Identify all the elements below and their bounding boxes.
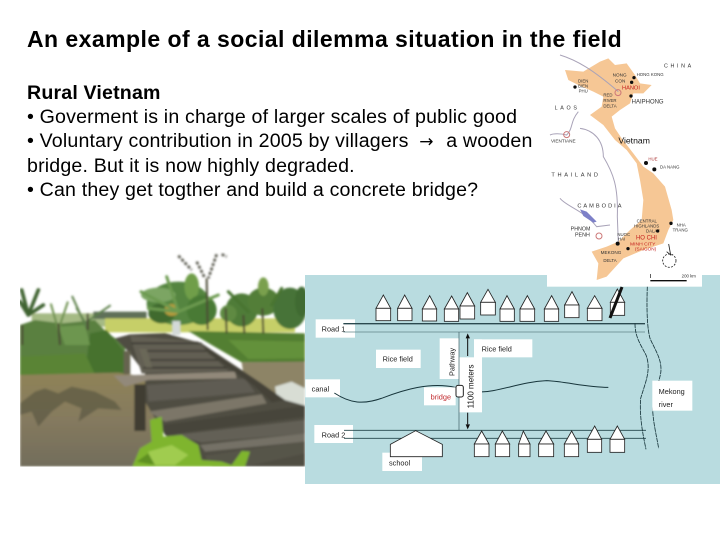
map: place labels: PENH	[575, 233, 590, 239]
map: place labels: CON	[615, 78, 625, 83]
photo: muddy water	[20, 362, 305, 467]
canal line	[334, 381, 608, 402]
arrow: map to village	[610, 287, 622, 318]
map: place labels: CHINA	[664, 64, 694, 70]
label: bridge: bridge	[431, 393, 451, 402]
text block: description: • Voluntary contribution in 2005 by villagers → a wooden	[27, 130, 533, 152]
label: 1100 meters: 1100 meters	[467, 365, 476, 408]
label: Mekong river: river	[659, 400, 673, 409]
map: place labels: HAI	[618, 237, 625, 242]
photo: vegetation background	[20, 254, 308, 376]
title: An example of a social dilemma situation in the field	[27, 26, 622, 52]
map: place labels: CAMBODIA	[577, 203, 624, 209]
map: place labels: HIGHLANDS	[634, 224, 659, 229]
label: Pathway	[440, 338, 459, 379]
map: place labels: HUE	[648, 157, 658, 162]
photo: foreground green bush	[132, 417, 250, 467]
map: place labels: DALAT	[646, 229, 660, 234]
label: Road 1	[316, 319, 355, 338]
map: scale bar: 200 km	[682, 273, 696, 278]
map: city markers	[573, 76, 673, 250]
map panel: Vietnam	[547, 55, 702, 287]
label: Rice field left: Rice field	[383, 355, 413, 364]
map: place labels: NHA	[677, 223, 686, 228]
photo: banana tree clumps	[141, 273, 308, 329]
map: place labels: PHNOM	[571, 226, 591, 232]
map: Vietnam territory	[565, 58, 673, 280]
photo: tree trunks	[22, 278, 263, 345]
map: place labels: Vietnam	[618, 136, 650, 146]
map: Con Dao inset	[663, 244, 676, 267]
map: place labels: TRANG	[673, 227, 688, 232]
label: Mekong river	[652, 381, 692, 411]
houses row 1	[376, 289, 625, 321]
label: Road 1: Road 1	[322, 324, 345, 333]
map: place labels: MINH CITY	[630, 242, 656, 248]
panel: village schematic background	[305, 275, 720, 484]
map: scale bar	[650, 273, 696, 281]
map: place labels: LAOS	[555, 105, 580, 111]
map: place labels: DELTA	[603, 258, 617, 263]
label: Rice field right	[474, 339, 532, 369]
text block: description: • Can they get togther and build a concrete bridge?	[27, 179, 478, 201]
map: place labels: NONG	[613, 73, 627, 78]
map: border rivers	[550, 55, 618, 243]
label: canal	[305, 379, 340, 397]
label: Road 2: Road 2	[322, 431, 345, 440]
map: Tonle Sap lake	[580, 209, 597, 223]
map: place labels: THAILAND	[551, 173, 601, 179]
map: capital markers	[564, 90, 621, 239]
map: place labels: MEKONG	[601, 250, 622, 255]
schematic: village diagram	[305, 287, 692, 471]
map: place labels: RED	[603, 93, 612, 98]
label: canal: canal	[312, 385, 330, 394]
label: Road 2	[314, 425, 353, 443]
text block: description: • Goverment is in charge of larger scales of public good	[27, 106, 517, 128]
map: place labels: NUOC	[617, 232, 630, 237]
map: place labels: DELTA	[603, 103, 617, 108]
map: place labels: DIEN	[578, 79, 588, 84]
map: place labels	[551, 64, 694, 263]
map: place labels: VIENTIANE	[551, 139, 576, 144]
map: place labels: HANOI	[622, 85, 640, 91]
icon: bridge on canal	[456, 385, 463, 397]
road 1	[343, 324, 645, 332]
photo: bare tree branches	[178, 254, 227, 278]
photo: banana leaves	[20, 277, 282, 330]
school: school	[389, 458, 411, 467]
map: place labels: HAIPHONG	[632, 100, 664, 106]
text block: description: Rural Vietnam	[27, 82, 161, 104]
houses row 2	[474, 426, 625, 457]
text block: description	[27, 82, 533, 201]
photo: bridge deck planks	[114, 333, 305, 467]
label: bridge	[424, 387, 456, 405]
illustration layer	[20, 54, 720, 484]
school	[382, 431, 442, 471]
pathway lines	[458, 332, 460, 430]
label: Rice field left	[376, 350, 421, 368]
map: place labels: DA NANG	[660, 165, 680, 170]
road 2	[344, 430, 646, 438]
map background	[547, 55, 702, 287]
Mekong river	[635, 287, 661, 449]
map: place labels: BIEN	[578, 84, 588, 89]
map: place labels: CENTRAL	[637, 219, 657, 224]
label: Pathway: Pathway	[448, 348, 457, 376]
text block: description: bridge. But it is now highly degraded.	[27, 155, 355, 177]
map: place labels: PHU	[579, 89, 588, 94]
arrow: distance	[466, 333, 470, 429]
map: place labels: RIVER	[603, 98, 617, 103]
label: 1100 meters	[459, 357, 482, 412]
photo: degraded wooden bridge	[20, 254, 308, 467]
map: place labels: (SAIGON)	[635, 247, 657, 252]
map: place labels: HONG KONG	[637, 72, 664, 77]
label: Mekong river: Mekong	[659, 387, 685, 396]
label: Rice field right: Rice field	[482, 344, 512, 353]
map: place labels: HO CHI	[636, 235, 657, 241]
